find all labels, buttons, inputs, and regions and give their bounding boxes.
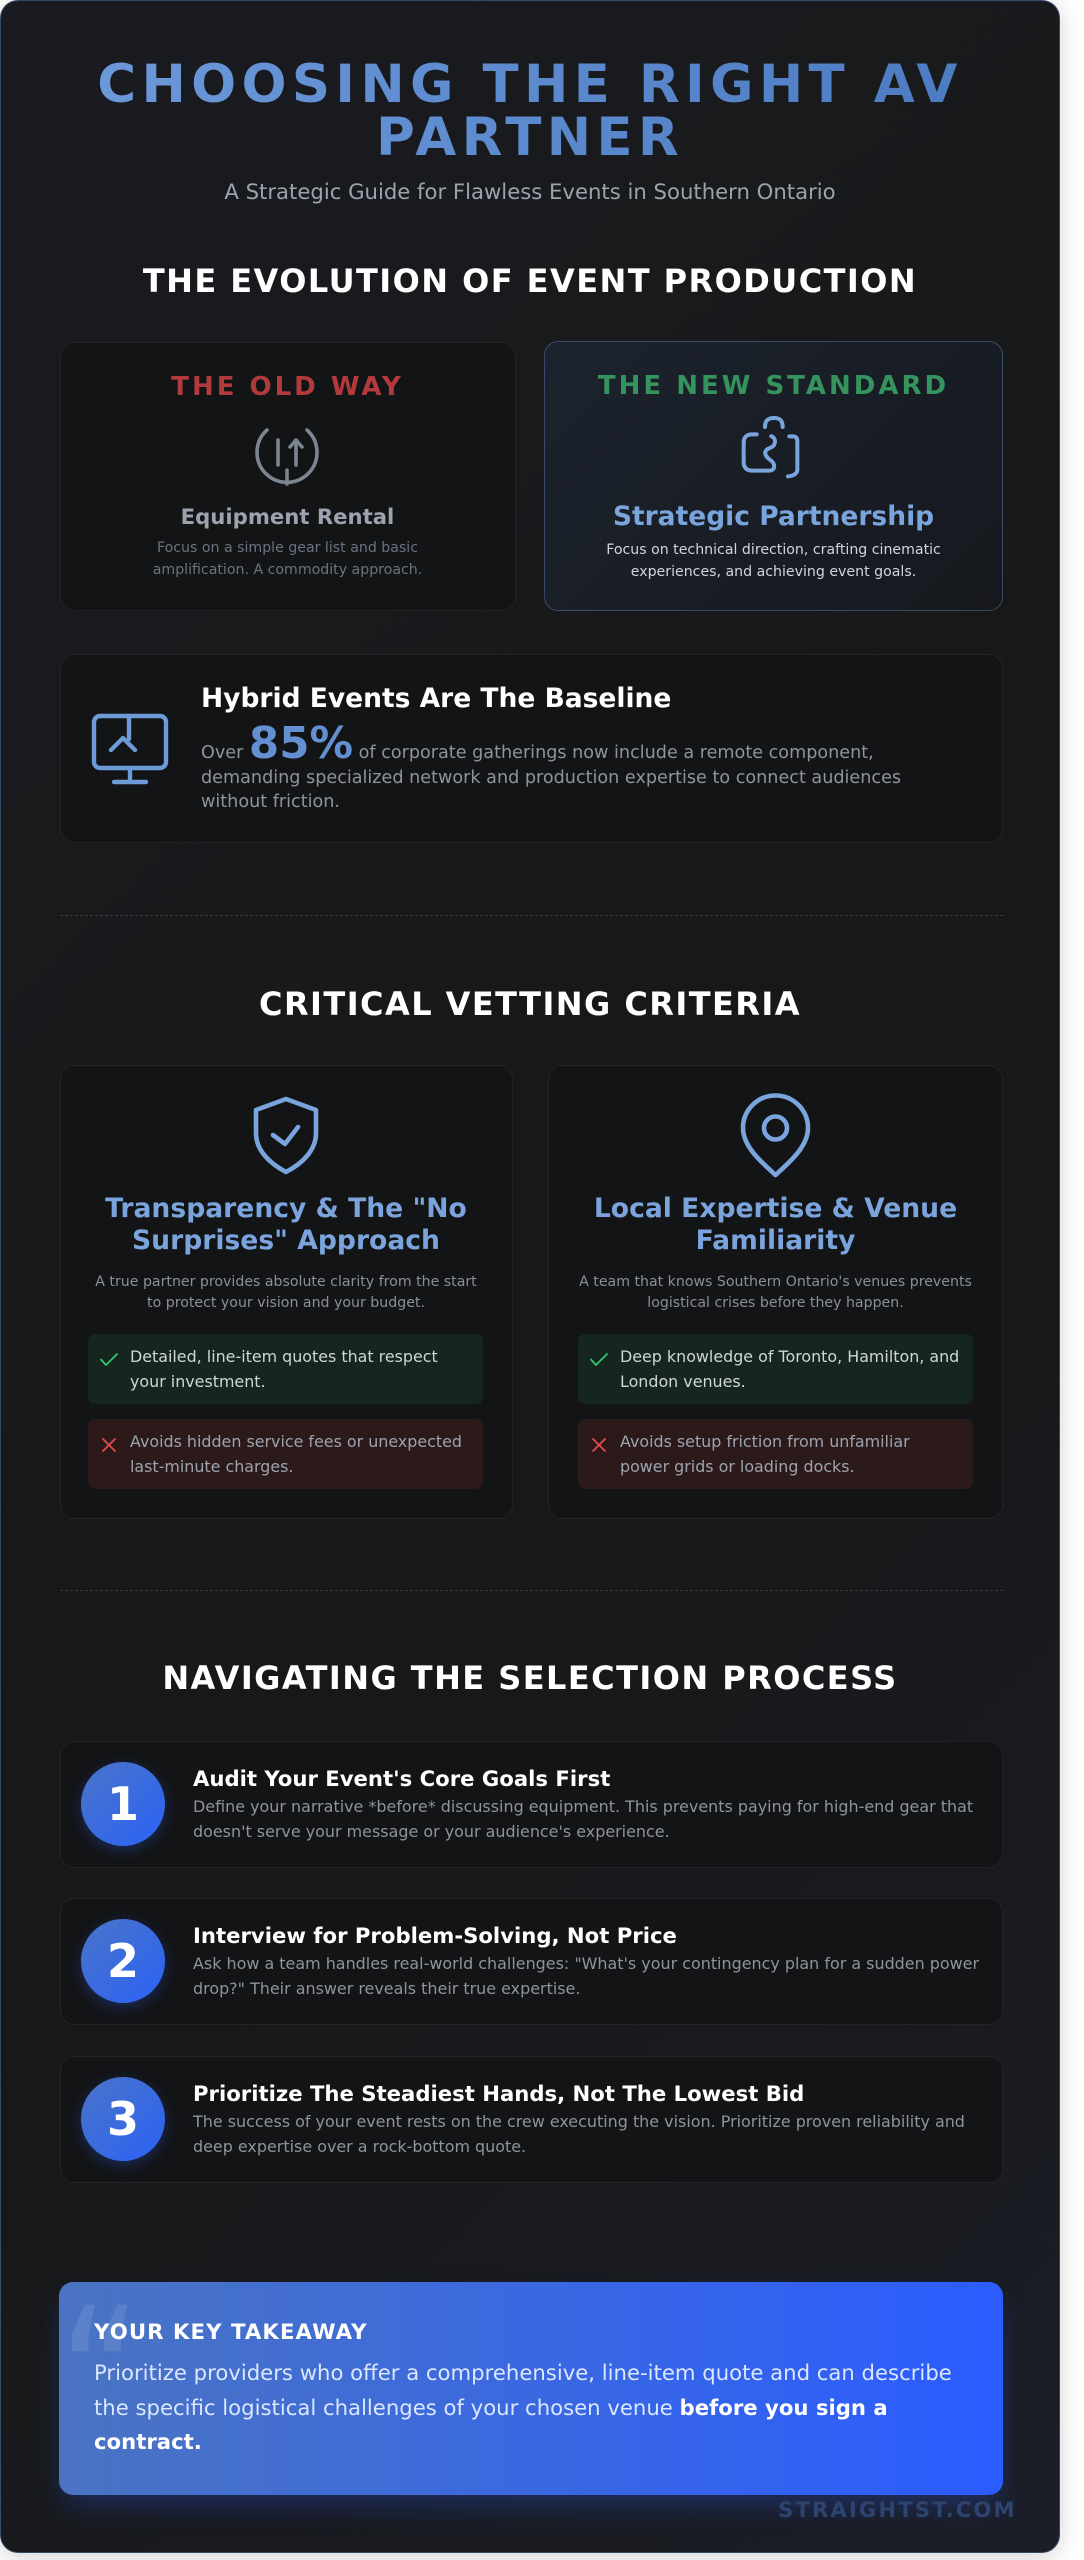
positive text: London venues. (620, 1372, 746, 1391)
icon: monitor (92, 714, 168, 784)
panel: transparency (60, 1065, 513, 1519)
step 1 heading: Audit Your Event's Core Goals First (193, 1766, 610, 1791)
step 3 heading: Prioritize The Steadiest Hands, Not The Lowest Bid (193, 2081, 804, 2106)
transparency negative point (88, 1419, 483, 1489)
icon: equipment rental (255, 428, 319, 486)
icon: check (590, 1353, 608, 1366)
icon: strategic partnership (742, 416, 800, 478)
new standard label: THE NEW STANDARD (598, 371, 949, 401)
local expertise title: Familiarity (696, 1225, 855, 1256)
title: PARTNER (376, 107, 684, 168)
step 2 text: drop?" Their answer reveals their true expertise. (193, 1979, 580, 1998)
step 2 heading: Interview for Problem-Solving, Not Price (193, 1923, 677, 1948)
number 2: 2 (107, 1934, 139, 1988)
takeaway text (94, 2360, 952, 2454)
hybrid statistic text: demanding specialized network and production expertise to connect audiences (201, 768, 901, 788)
number 1: 1 (107, 1777, 139, 1831)
positive text: Deep knowledge of Toronto, Hamilton, and (620, 1347, 959, 1366)
icon: check (100, 1353, 118, 1366)
hybrid statistic text: without friction. (201, 792, 340, 812)
transparency title (105, 1193, 467, 1256)
step 1 text (193, 1797, 973, 1841)
icon: map pin (740, 1093, 810, 1178)
transparency description (95, 1274, 477, 1310)
negative text: last-minute charges. (130, 1457, 293, 1476)
icon: cross (592, 1438, 606, 1452)
panel: hybrid events (60, 654, 1003, 843)
positive text: Detailed, line-item quotes that respect (130, 1347, 438, 1366)
takeaway heading: YOUR KEY TAKEAWAY (94, 2320, 368, 2345)
local expertise title: Local Expertise & Venue (594, 1193, 957, 1224)
heading: the evolution of event production: THE EVOLUTION OF EVENT PRODUCTION (143, 262, 917, 300)
strategic partnership description: experiences, and achieving event goals. (631, 564, 916, 580)
negative text: Avoids hidden service fees or unexpected (130, 1432, 462, 1451)
step 1 text: Define your narrative *before* discussing equipment. This prevents paying for high-end gear that (193, 1797, 973, 1816)
step 3 (60, 2056, 1003, 2183)
negative text: Avoids setup friction from unfamiliar (620, 1432, 910, 1451)
positive text (130, 1347, 438, 1391)
panel: the old way (60, 342, 516, 611)
takeaway text: the specific logistical challenges of your chosen venue before you sign a (94, 2394, 888, 2420)
panel: the new standard (544, 341, 1003, 611)
panel: local expertise (548, 1065, 1003, 1519)
local expertise title (594, 1193, 957, 1256)
title: CHOOSING THE RIGHT AV (97, 54, 963, 115)
local expertise description: A team that knows Southern Ontario's venues prevents (579, 1274, 972, 1290)
callout: key takeaway (59, 2282, 1003, 2495)
step 2 (60, 1898, 1003, 2025)
negative text (620, 1432, 910, 1476)
icon: shield (254, 1096, 318, 1174)
local expertise description (579, 1274, 972, 1310)
step 1 (60, 1741, 1003, 1868)
strategic partnership description: Focus on technical direction, crafting cinematic (606, 542, 941, 558)
takeaway text: Prioritize providers who offer a comprehensive, line-item quote and can describe (94, 2360, 952, 2385)
local negative point (578, 1419, 973, 1489)
equipment rental description (153, 540, 422, 578)
hybrid statistic text: Over 85% of corporate gatherings now include a remote component, (201, 719, 874, 769)
icon: cross (102, 1438, 116, 1452)
step 2 text (193, 1954, 980, 1998)
negative text: power grids or loading docks. (620, 1457, 855, 1476)
transparency description: A true partner provides absolute clarity from the start (95, 1274, 477, 1290)
hybrid heading: Hybrid Events Are The Baseline (201, 683, 671, 714)
positive text (620, 1347, 959, 1391)
heading: navigating the selection process: NAVIGATING THE SELECTION PROCESS (162, 1659, 898, 1697)
positive text: your investment. (130, 1372, 266, 1391)
equipment rental title: Equipment Rental (181, 504, 394, 529)
hybrid statistic text (201, 719, 901, 812)
old way label: THE OLD WAY (171, 372, 404, 402)
subtitle: A Strategic Guide for Flawless Events in Southern Ontario (224, 179, 836, 204)
local expertise description: logistical crises before they happen. (647, 1294, 904, 1310)
step 3 text: deep expertise over a rock-bottom quote. (193, 2137, 526, 2156)
number 3 (81, 2077, 165, 2161)
takeaway text: contract. (94, 2429, 202, 2454)
strategic partnership title: Strategic Partnership (613, 501, 934, 532)
transparency title: Transparency & The "No (105, 1193, 467, 1224)
strategic partnership description (606, 542, 941, 580)
transparency title: Surprises" Approach (132, 1225, 440, 1256)
step 3 text (192, 2112, 965, 2156)
decorative quote mark: “ (58, 2268, 142, 2493)
step 3 text: The success of your event rests on the crew executing the vision. Prioritize proven reliability and (193, 2112, 965, 2131)
local positive point (578, 1334, 973, 1404)
heading: critical vetting criteria: CRITICAL VETTING CRITERIA (259, 985, 801, 1023)
number 2 (81, 1919, 165, 2003)
footer brand: STRAIGHTST.COM (778, 2497, 1017, 2522)
number 3: 3 (107, 2092, 139, 2146)
step 1 text: doesn't serve your message or your audience's experience. (193, 1822, 670, 1841)
equipment rental description: Focus on a simple gear list and basic (157, 540, 418, 556)
title (0, 58, 1060, 164)
step 2 text: Ask how a team handles real-world challenges: "What's your contingency plan for a sudden power (193, 1954, 979, 1973)
equipment rental description: amplification. A commodity approach. (153, 562, 422, 578)
transparency positive point (88, 1334, 483, 1404)
negative text (130, 1432, 462, 1476)
transparency description: to protect your vision and your budget. (147, 1294, 425, 1310)
number 1 (81, 1762, 165, 1846)
